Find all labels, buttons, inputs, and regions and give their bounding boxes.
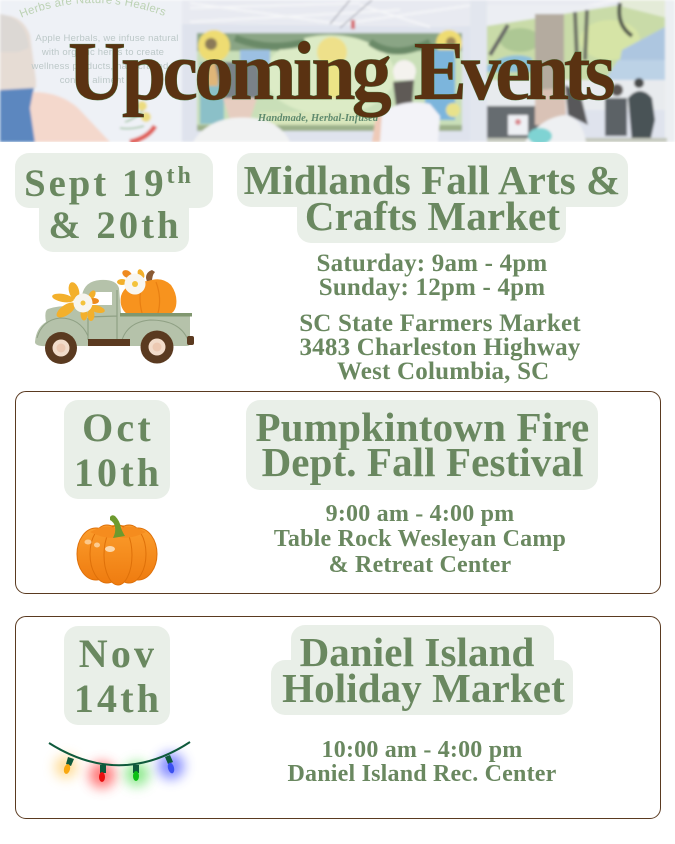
event 2: details: 9:00 am - 4:00 pm bbox=[326, 500, 514, 526]
event 1: location bbox=[299, 310, 581, 384]
banner photo: con on aliment bbox=[60, 75, 124, 86]
event 3: title: Daniel Island bbox=[300, 629, 534, 675]
event 1: date badge bbox=[15, 153, 213, 252]
event 2: date badge bbox=[64, 400, 170, 499]
banner photo: with organic herbs to create bbox=[41, 47, 164, 58]
event 3: date badge: 14th bbox=[74, 676, 162, 721]
event 3: date badge: Nov bbox=[79, 631, 157, 676]
icon: string lights bbox=[48, 741, 192, 796]
event 1: title: Crafts Market bbox=[305, 193, 560, 239]
event 1: location: SC State Farmers Market bbox=[299, 310, 581, 336]
event 3: details: Daniel Island Rec. Center bbox=[288, 761, 556, 787]
event 3: date badge bbox=[64, 626, 170, 725]
event 3: title: Holiday Market bbox=[282, 665, 565, 711]
event 2: details: Table Rock Wesleyan Camp bbox=[274, 526, 566, 552]
event 1: hours: Saturday: 9am - 4pm bbox=[317, 250, 547, 277]
event 3: details: 10:00 am - 4:00 pm bbox=[322, 737, 522, 763]
event 2: title bbox=[246, 400, 598, 490]
event 1: date badge: & 20th bbox=[48, 205, 182, 247]
event 1: location: West Columbia, SC bbox=[337, 358, 549, 384]
icon: truck with pumpkin bbox=[35, 269, 194, 364]
banner photo: Apple Herbals, we infuse natural bbox=[35, 33, 179, 44]
event 2: date badge: 10th bbox=[74, 450, 162, 495]
event 1: hours bbox=[317, 250, 547, 301]
banner photo: wellness products, handcrafted bbox=[31, 61, 168, 72]
event 1: title: Midlands Fall Arts & bbox=[244, 157, 620, 203]
event 1: location: 3483 Charleston Highway bbox=[299, 334, 580, 360]
banner photo bbox=[0, 0, 675, 142]
panel: event 2 frame bbox=[15, 391, 661, 594]
event 3: title bbox=[271, 625, 573, 715]
event 1: date badge: Sept 19th bbox=[24, 163, 194, 205]
event 2: title: Dept. Fall Festival bbox=[262, 439, 583, 485]
event 1: title bbox=[237, 153, 628, 243]
event 1: hours: Sunday: 12pm - 4pm bbox=[319, 274, 545, 301]
event 2: details: & Retreat Center bbox=[329, 552, 511, 578]
panel: event 3 frame bbox=[15, 616, 661, 819]
banner photo: Handmade, Herbal-Infused bbox=[257, 113, 379, 124]
event 3: details bbox=[288, 737, 556, 787]
icon: pumpkin bbox=[76, 515, 158, 586]
title: Upcoming Events bbox=[68, 24, 610, 118]
event 2: details bbox=[274, 500, 566, 578]
event 2: date badge: Oct bbox=[82, 405, 154, 450]
event 2: title: Pumpkintown Fire bbox=[256, 404, 589, 450]
